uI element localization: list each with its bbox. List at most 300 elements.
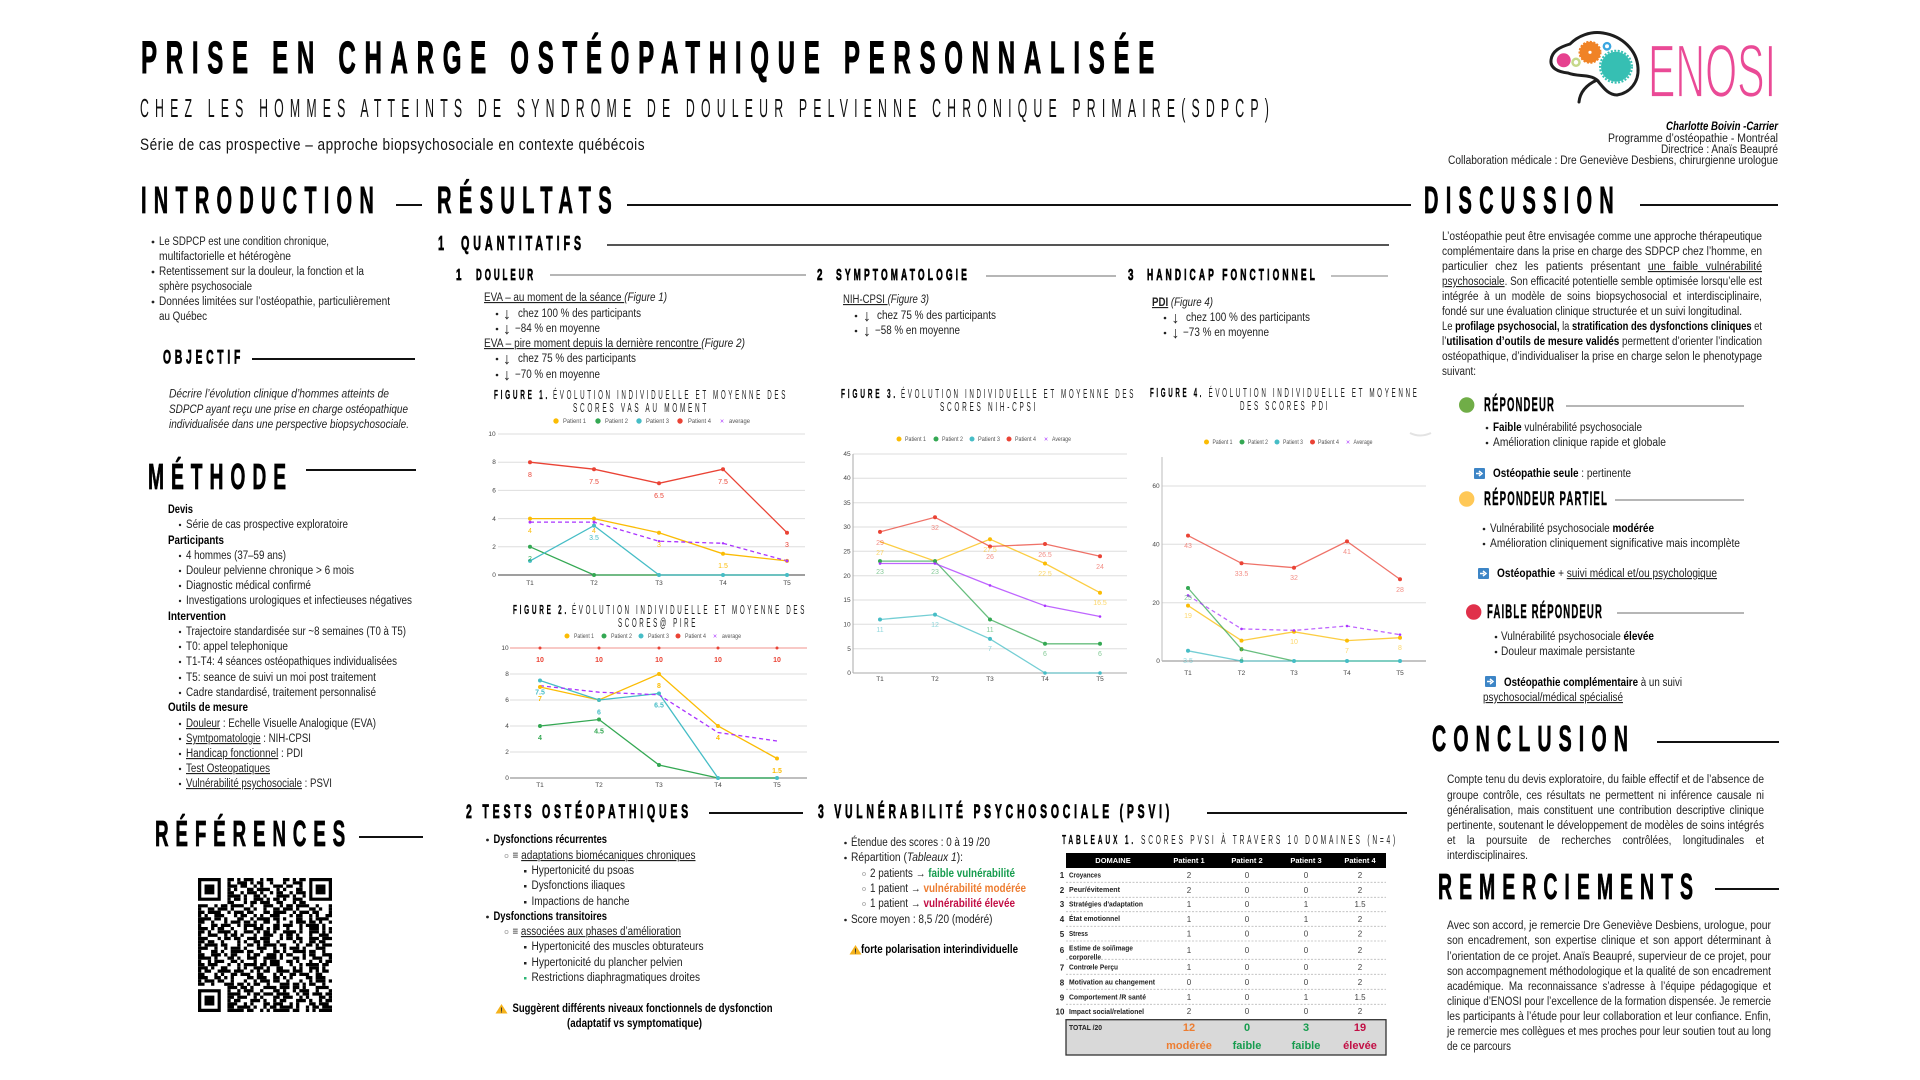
figure 2 chart: 7 — [538, 696, 542, 703]
figure 1 chart: T5 — [783, 580, 791, 587]
panel: vulnérabilité psychosociale: forte polarisation interindividuelle — [861, 944, 1018, 956]
table: PSVI scores: 0 — [1304, 886, 1309, 895]
figure 4 chart: T1 — [1184, 670, 1192, 677]
author block — [1448, 121, 1778, 167]
panel: faible répondeur — [1466, 601, 1744, 704]
table: PSVI scores: 0 — [1245, 1007, 1250, 1016]
table: PSVI scores: 2 — [1358, 978, 1363, 987]
text block: conclusion: Compte tenu du devis exploratoire, du faible effectif et de l’absence de — [1447, 774, 1764, 786]
table: PSVI scores: 10 — [1056, 1008, 1065, 1016]
figure 2 chart: 0 — [505, 775, 509, 782]
panel: tests ostéopathiques: Dysfonctions iliaques — [532, 880, 625, 892]
text block: symptomatologie: −58 % en moyenne — [875, 325, 960, 337]
icon: warning — [850, 945, 862, 956]
figure 3 chart: 26.5 — [1038, 552, 1052, 559]
table: PSVI scores: Comportement /R santé — [1069, 992, 1146, 1002]
legend: figure 4: Patient 1 — [1212, 439, 1233, 446]
text block: remerciements: clinique d’ENOSI pour l’excellence de la formation dispensée. Je remercie — [1447, 996, 1771, 1008]
table: PSVI scores: 1 — [1187, 915, 1192, 924]
text block: remerciements: Avec son accord, je remercie Dre Geneviève Desbiens, urologue, pour — [1447, 920, 1771, 932]
figure 2 chart: 10 — [536, 657, 544, 664]
table: PSVI scores: 1 — [1187, 930, 1192, 938]
panel: répondeur partiel: Amélioration cliniquement significative mais incomplète — [1490, 538, 1740, 550]
author block: Collaboration médicale : Dre Geneviève Desbiens, chirurgienne urologue — [1448, 155, 1778, 167]
figure 3 chart — [843, 436, 1127, 683]
figure 2 chart: 10 — [501, 645, 509, 652]
figure 3 chart: 16.5 — [1093, 600, 1107, 607]
heading: quantitatifs: 1 — [438, 233, 448, 255]
legend: figure 3 — [896, 436, 1071, 444]
icon: arrow — [1485, 676, 1496, 687]
table: PSVI scores: 0 — [1304, 1007, 1309, 1016]
legend: figure 1: average — [729, 418, 750, 425]
text block: objectif: SDPCP ayant reçu une prise en charge ostéopathique — [169, 404, 408, 416]
table: PSVI scores: 2 — [1358, 886, 1363, 895]
panel: tests ostéopathiques: Dysfonctions transitoires — [494, 911, 607, 923]
heading: remerciements: REMERCIEMENTS — [1438, 866, 1700, 907]
legend: figure 3: Patient 1 — [905, 436, 926, 443]
table: PSVI scores: 3 — [1060, 900, 1065, 909]
table: PSVI scores — [1056, 853, 1386, 1055]
text block: remerciements: académique. Ma reconnaissance s’adresse à l’équipe pédagogique et — [1447, 981, 1772, 993]
table: PSVI scores: Patient 1 — [1173, 856, 1205, 865]
table: PSVI scores: 2 — [1358, 946, 1363, 955]
figure 4 chart: T2 — [1238, 670, 1246, 677]
figure 2 chart: T1 — [536, 782, 544, 789]
legend: figure 3: Patient 4 — [1015, 436, 1036, 443]
figure 3 chart: T4 — [1041, 676, 1049, 683]
legend: figure 4: Average — [1354, 439, 1373, 446]
text block: handicap fonctionnel: chez 100 % des participants — [1186, 312, 1310, 324]
legend: figure 1: Patient 3 — [646, 418, 669, 425]
table: PSVI scores: 0 — [1245, 915, 1250, 924]
table: PSVI scores: Patient 3 — [1290, 856, 1322, 865]
panel: répondeur partiel: RÉPONDEUR PARTIEL — [1484, 488, 1608, 510]
panel: vulnérabilité psychosociale: Étendue des scores : 0 à 19 /20 — [851, 836, 990, 849]
heading: handicap fonctionnel: 3 — [1128, 267, 1137, 284]
text block: conclusion: pertinente, soutenant le développement de modèles de soins intégrés — [1447, 820, 1764, 832]
text block: remerciements: je remercie mes collègues et mes proches pour leur soutien tout au long — [1446, 1026, 1771, 1038]
table total row: TOTAL /20 — [1069, 1023, 1102, 1032]
figure 3 chart: 32 — [931, 525, 939, 532]
text block: remerciements: de ce parcours — [1447, 1041, 1511, 1053]
figure 3 chart: 40 — [843, 475, 851, 482]
table: PSVI scores: Peur/évitement — [1069, 885, 1120, 894]
table: PSVI scores: 2 — [1187, 871, 1192, 880]
panel: répondeur: RÉPONDEUR — [1484, 394, 1555, 416]
table: PSVI scores: 6 — [1060, 946, 1065, 955]
panel: méthode: Douleur : Echelle Visuelle Analogique (EVA) — [186, 718, 376, 730]
table: PSVI scores: 0 — [1245, 886, 1250, 895]
panel: introduction: sphère psychosociale — [159, 281, 252, 293]
figure 1 chart: T2 — [590, 580, 598, 587]
heading: objectif: OBJECTIF — [163, 348, 244, 368]
figure 4 chart: 28 — [1396, 587, 1404, 594]
panel: méthode: Cadre standardisé, traitement personnalisé — [186, 687, 376, 699]
figure 2 chart: 1.5 — [772, 768, 782, 775]
text block: douleur — [484, 292, 745, 384]
figure 2 chart: 8 — [505, 671, 509, 678]
text block: objectif: individualisée dans une perspective biopsychosociale. — [169, 419, 409, 431]
figure 2 chart: 6 — [505, 697, 509, 704]
panel: répondeur partiel: Vulnérabilité psychosociale modérée — [1490, 523, 1654, 535]
heading: vulnérabilité psychosociale: 3 VULNÉRABILITÉ PSYCHOSOCIALE (PSVI) — [818, 801, 1173, 823]
panel: vulnérabilité psychosociale: 1 patient → vulnérabilité élevée — [870, 898, 1015, 910]
icon: arrow — [1474, 468, 1485, 479]
text block: conclusion: groupe contrôle, ces résultats ne permettent ni inférence causale ni — [1447, 790, 1764, 802]
panel: tests ostéopathiques: (adaptatif vs symptomatique) — [567, 1018, 702, 1030]
figure 4 chart: 4 — [1240, 657, 1244, 664]
text block: remerciements: son accompagnement méthodologique et la qualité de son encadrement — [1447, 966, 1772, 978]
table: PSVI scores: 2 — [1358, 871, 1363, 880]
text block: symptomatologie: ↓ — [863, 323, 871, 340]
figure 1 chart: 7.5 — [718, 479, 728, 486]
text block: douleur: −70 % en moyenne — [515, 369, 600, 381]
text: ÉVOLUTION INDIVIDUELLE ET MOYENNE DES — [553, 387, 788, 402]
table total row: élevée — [1343, 1040, 1377, 1052]
text block: discussion: l’utilisation d’outils de mesure validés permettent d’orienter l’indication — [1442, 336, 1762, 348]
figure 3 chart: 6 — [1098, 651, 1102, 658]
table: PSVI scores: 2 — [1358, 1007, 1363, 1016]
figure 1 chart: 4 — [592, 528, 596, 535]
text block: douleur: chez 100 % des participants — [518, 308, 641, 320]
text block: symptomatologie: ↓ — [863, 308, 871, 325]
legend: figure 1: Patient 4 — [688, 418, 711, 425]
figure 4 chart: 3.5 — [1183, 658, 1193, 665]
figure 4 chart: 10 — [1290, 639, 1298, 646]
panel: méthode: Devis — [168, 504, 193, 516]
table: PSVI scores: 0 — [1245, 900, 1250, 909]
figure 3 chart: 23 — [931, 569, 939, 576]
figure 2 chart: 8 — [657, 683, 661, 690]
figure 3 chart: 25 — [843, 548, 851, 556]
table title — [1062, 832, 1398, 847]
figure 1 chart: T1 — [526, 580, 534, 587]
table: PSVI scores: 0 — [1245, 946, 1250, 955]
figure 3 chart: 22.5 — [1038, 571, 1052, 578]
figure 2 chart: T5 — [773, 782, 781, 789]
panel: vulnérabilité psychosociale: 2 patients → faible vulnérabilité — [870, 868, 1015, 880]
table: PSVI scores: Croyances — [1069, 870, 1101, 880]
text block: remerciements: son encadrement, son expertise clinique et son apport déterminant à — [1447, 935, 1772, 947]
table: PSVI scores: 0 — [1187, 978, 1192, 987]
figure 1 chart: 4 — [528, 528, 532, 535]
panel: répondeur: Ostéopathie seule : pertinente — [1493, 468, 1631, 480]
table title: TABLEAUX 1. — [1062, 832, 1136, 847]
icon: arrow — [1478, 568, 1489, 579]
panel: répondeur — [1459, 394, 1744, 480]
table: PSVI scores: 1 — [1304, 915, 1309, 924]
panel: méthode: Symtpomatologie : NIH-CPSI — [186, 733, 311, 745]
figure 1 chart: 8 — [492, 459, 496, 466]
figure 3 chart: 35 — [843, 500, 851, 507]
table: PSVI scores: Stratégies d'adaptation — [1069, 900, 1143, 908]
panel: faible répondeur: FAIBLE RÉPONDEUR — [1487, 601, 1603, 623]
legend: figure 3: Average — [1052, 436, 1071, 443]
panel: répondeur partiel — [1459, 488, 1744, 580]
text block: symptomatologie: chez 75 % des participants — [877, 310, 996, 322]
text block: discussion: complémentaire dans la prise en charge des SDPCP chez l’homme, en — [1442, 246, 1762, 258]
author block: Charlotte Boivin -Carrier — [1666, 121, 1778, 133]
panel: méthode: Participants — [168, 535, 224, 547]
panel: introduction — [152, 236, 391, 323]
text block: handicap fonctionnel: ↓ — [1172, 325, 1180, 342]
panel: méthode: Outils de mesure — [168, 702, 248, 714]
panel: méthode: Trajectoire standardisée sur ~8 semaines (T0 à T5) — [186, 626, 406, 638]
table: PSVI scores: Estime de soi/image — [1069, 944, 1133, 952]
figure 4 chart: T3 — [1290, 670, 1298, 677]
text block: douleur: chez 75 % des participants — [518, 353, 636, 365]
text block: discussion: fondé sur une évaluation clinique structurée et un suivi longitudinal. — [1442, 306, 1742, 318]
panel: tests ostéopathiques: Hypertonicité du plancher pelvien — [532, 957, 682, 969]
table: PSVI scores: 8 — [1060, 978, 1065, 988]
figure 3 chart: 11 — [986, 627, 994, 634]
table: PSVI scores: Stress — [1069, 929, 1088, 938]
text block: conclusion: interdisciplinaires. — [1447, 850, 1528, 862]
table: PSVI scores: 1 — [1304, 993, 1309, 1002]
heading: conclusion: CONCLUSION — [1432, 718, 1635, 759]
table: PSVI scores: 5 — [1060, 930, 1065, 939]
table: PSVI scores: 0 — [1304, 871, 1309, 880]
figure 1 chart: 6 — [492, 488, 496, 494]
figure 4 chart: 32 — [1290, 575, 1298, 582]
text block: conclusion — [1447, 774, 1765, 862]
legend: figure 1: Patient 2 — [605, 418, 628, 425]
table total row: modérée — [1166, 1040, 1212, 1052]
figure 1 title: SCORES VAS AU MOMENT — [573, 400, 709, 415]
table total row: faible — [1233, 1040, 1261, 1052]
panel: introduction: Données limitées sur l’ostéopathie, particulièrement — [159, 296, 391, 308]
text block: handicap fonctionnel: −73 % en moyenne — [1183, 327, 1269, 339]
text block: discussion: suivant: — [1442, 366, 1476, 378]
figure 1 chart: 7.5 — [589, 479, 599, 486]
legend: figure 2: Patient 2 — [611, 633, 632, 640]
table: PSVI scores: 1 — [1187, 900, 1192, 909]
heading: quantitatifs — [438, 233, 1389, 255]
figure 1 title: FIGURE 1. — [494, 387, 550, 402]
figure 1 title — [494, 387, 788, 415]
panel: faible répondeur: Douleur maximale persistante — [1501, 646, 1635, 658]
panel: méthode: Douleur pelvienne chronique > 6 mois — [186, 565, 354, 577]
text block: remerciements: l’orientation de ce projet. Anaïs Beaupré, supervieur de ce projet, pour — [1447, 951, 1771, 963]
figure 1 chart: 8 — [528, 472, 532, 479]
figure 3 chart: 27.5 — [983, 547, 997, 554]
heading: discussion: DISCUSSION — [1424, 180, 1621, 222]
heading: références: RÉFÉRENCES — [155, 813, 352, 854]
figure 2 chart: 10 — [773, 657, 781, 664]
table: PSVI scores: 0 — [1304, 963, 1309, 972]
figure 1 chart: 3 — [785, 542, 789, 549]
table total row: 3 — [1303, 1022, 1309, 1034]
table: PSVI scores: 1 — [1060, 871, 1065, 880]
figure 4 chart: 19 — [1184, 613, 1192, 620]
panel: tests ostéopathiques: Hypertonicité des muscles obturateurs — [532, 941, 704, 953]
figure 1 chart: T4 — [719, 580, 727, 587]
panel: méthode: T1-T4: 4 séances ostéopathiques individualisées — [186, 656, 397, 668]
legend: figure 4: Patient 4 — [1318, 439, 1339, 446]
text block: douleur: EVA – au moment de la séance (Figure 1) — [484, 292, 667, 304]
figure 2 chart: 4 — [716, 735, 720, 742]
figure 4 chart: 0 — [1156, 658, 1160, 665]
heading: douleur — [456, 267, 806, 284]
figure 1 chart: 3 — [657, 542, 661, 549]
figure 2 chart — [501, 633, 807, 789]
text block: handicap fonctionnel — [1152, 297, 1310, 342]
table: PSVI scores: 0 — [1245, 993, 1250, 1002]
figure 3 chart: 27 — [876, 550, 884, 557]
figure 4 chart: 20 — [1152, 600, 1160, 607]
panel: introduction: multifactorielle et hétérogène — [159, 251, 291, 263]
figure 2 chart: T3 — [655, 782, 663, 789]
panel: faible répondeur: Vulnérabilité psychosociale élevée — [1501, 631, 1654, 643]
figure 2 chart: 4 — [505, 723, 509, 730]
text block: objectif — [169, 388, 409, 431]
table: PSVI scores: 2 — [1358, 915, 1363, 924]
legend: figure 4: Patient 2 — [1248, 439, 1268, 446]
text block: discussion — [1442, 231, 1763, 378]
legend: figure 2: Patient 4 — [685, 633, 706, 640]
figure 4 chart: 43 — [1184, 543, 1192, 550]
panel: tests ostéopathiques: Impactions de hanche — [532, 896, 630, 908]
figure 1 chart — [488, 418, 805, 587]
heading: résultats: RÉSULTATS — [437, 178, 619, 222]
text block: douleur: ↓ — [503, 306, 511, 323]
panel: méthode: 4 hommes (37–59 ans) — [186, 550, 286, 562]
panel: répondeur partiel: Ostéopathie + suivi médical et/ou psychologique — [1497, 568, 1717, 580]
table: PSVI scores: Patient 4 — [1344, 856, 1376, 865]
legend: figure 4: Patient 3 — [1283, 439, 1303, 446]
figure 4 chart: 41 — [1343, 549, 1351, 556]
panel: introduction: Le SDPCP est une condition chronique, — [159, 236, 329, 248]
table: PSVI scores: 2 — [1060, 886, 1065, 895]
table: PSVI scores: 0 — [1245, 978, 1250, 987]
heading: quantitatifs: QUANTITATIFS — [461, 233, 585, 255]
figure 1 chart: 0 — [492, 572, 496, 579]
icon: QR code — [198, 878, 332, 1012]
logo: ENOSI: ENOSI — [1648, 29, 1776, 113]
panel: introduction: au Québec — [159, 311, 207, 323]
table: PSVI scores: 1 — [1304, 900, 1309, 909]
legend: figure 1: Patient 1 — [563, 418, 586, 425]
figure 4 chart: 7 — [1240, 647, 1244, 654]
text block: douleur: ↓ — [503, 367, 511, 384]
panel: méthode — [168, 504, 412, 790]
panel: méthode: T5: seance de suivi un moi post traitement — [186, 672, 377, 684]
icon: warning: ! — [854, 946, 857, 956]
panel: tests ostéopathiques — [486, 834, 772, 1030]
table: PSVI scores: 2 — [1187, 886, 1192, 895]
table: PSVI scores: DOMAINE — [1095, 856, 1131, 865]
text block: objectif: Décrire l’évolution clinique d’hommes atteints de — [169, 388, 389, 400]
figure 4 chart: 25 — [1184, 595, 1192, 602]
panel: méthode: Vulnérabilité psychosociale : PSVI — [186, 778, 332, 790]
figure 2 chart: T4 — [714, 782, 722, 789]
figure 3 chart: 6 — [1043, 651, 1047, 658]
table total row: 12 — [1183, 1022, 1195, 1034]
figure 2 chart: 7.5 — [535, 690, 545, 696]
figure 3 title — [841, 386, 1136, 414]
text: ÉVOLUTION INDIVIDUELLE ET MOYENNE — [1208, 385, 1420, 400]
panel: tests ostéopathiques: Suggèrent différents niveaux fonctionnels de dysfonction — [512, 1003, 772, 1015]
text block: conclusion: et la poursuite de recherches contrôlées, longitudinales et — [1447, 835, 1765, 847]
text block: discussion: particulier chez les patients présentant une faible vulnérabilité — [1442, 261, 1762, 273]
figure 3 chart: 12 — [931, 622, 939, 629]
panel: vulnérabilité psychosociale: Répartition (Tableaux 1): — [851, 852, 963, 864]
panel: méthode: Diagnostic médical confirmé — [186, 580, 311, 592]
legend: figure 3: × — [1044, 436, 1048, 444]
table: PSVI scores: Motivation au changement — [1069, 978, 1155, 986]
legend: figure 2: Patient 1 — [574, 633, 594, 640]
figure 2 chart: 4 — [538, 735, 542, 742]
figure 4 chart — [1152, 433, 1431, 677]
figure 1 chart: 10 — [488, 431, 496, 438]
tagline: Série de cas prospective – approche biopsychosociale en contexte québécois — [140, 135, 645, 154]
text: ÉVOLUTION INDIVIDUELLE ET MOYENNE DES — [572, 602, 807, 617]
heading: introduction: INTRODUCTION — [141, 180, 381, 222]
text block: discussion: ostéopathique, d’individualiser la prise en charge selon le phenotypage — [1442, 351, 1762, 363]
figure 2 chart: 6.5 — [654, 702, 664, 710]
figure 3 chart: 30 — [843, 524, 851, 531]
heading: tests ostéopathiques: 2 TESTS OSTÉOPATHIQUES — [466, 801, 692, 823]
figure 1 chart: 1.5 — [718, 563, 728, 570]
figure 1 chart: 3.5 — [589, 535, 599, 542]
figure 3 title: SCORES NIH-CPSI — [940, 399, 1038, 414]
panel: méthode: Série de cas prospective exploratoire — [186, 519, 348, 531]
legend: figure 3: Patient 3 — [978, 436, 1000, 443]
text block: discussion: psychosociale. Son efficacité potentielle semble optimisée lorsqu’elle est — [1442, 276, 1763, 288]
panel: méthode: Intervention — [168, 611, 226, 623]
table total row: 19 — [1354, 1022, 1366, 1034]
figure 2 chart: 10 — [714, 657, 722, 664]
table: PSVI scores: Patient 2 — [1231, 856, 1263, 865]
legend: figure 1 — [553, 418, 750, 426]
table: PSVI scores: 0 — [1245, 963, 1250, 972]
legend: figure 4 — [1204, 439, 1373, 446]
legend: figure 4: × — [1346, 440, 1350, 446]
table: PSVI scores: 2 — [1187, 1007, 1192, 1016]
text block: douleur: ↓ — [503, 321, 511, 338]
text block: discussion: Le profilage psychosocial, la stratification des dysfonctions cliniques et — [1442, 321, 1763, 333]
heading: douleur: 1 — [456, 267, 465, 284]
figure 4 title — [1150, 385, 1420, 413]
figure 3 chart: 24 — [1096, 564, 1104, 571]
figure 4 chart: 40 — [1152, 542, 1160, 548]
figure 3 chart: T5 — [1096, 676, 1104, 683]
figure 3 chart: 10 — [843, 622, 851, 628]
table: PSVI scores: 1 — [1187, 963, 1192, 972]
legend: figure 3: Patient 2 — [942, 436, 963, 443]
legend: figure 2: average — [722, 633, 741, 640]
legend: figure 2: × — [713, 634, 717, 640]
figure 3 chart: 45 — [843, 451, 851, 458]
figure 2 chart: 4.5 — [594, 728, 604, 736]
figure 4 chart: 7 — [1345, 648, 1349, 655]
figure 1 chart: T3 — [655, 580, 663, 587]
text block: douleur: ↓ — [503, 351, 511, 368]
table: PSVI scores: corporelle — [1069, 952, 1101, 962]
figure 3 chart: T2 — [931, 676, 939, 683]
heading: méthode: MÉTHODE — [148, 456, 293, 497]
author block: Programme d’ostéopathie - Montréal — [1608, 133, 1778, 145]
table: PSVI scores: 2 — [1358, 930, 1363, 938]
table: PSVI scores: 1.5 — [1354, 993, 1366, 1002]
panel: tests ostéopathiques: ≡ adaptations biomécaniques chroniques — [512, 850, 696, 862]
figure 3 chart: 20 — [843, 573, 851, 580]
text block: handicap fonctionnel: PDI (Figure 4) — [1152, 297, 1213, 309]
figure 3 chart: 5 — [847, 646, 851, 653]
figure 4 chart: T4 — [1343, 670, 1351, 677]
panel: introduction: Retentissement sur la douleur, la fonction et la — [159, 266, 365, 278]
